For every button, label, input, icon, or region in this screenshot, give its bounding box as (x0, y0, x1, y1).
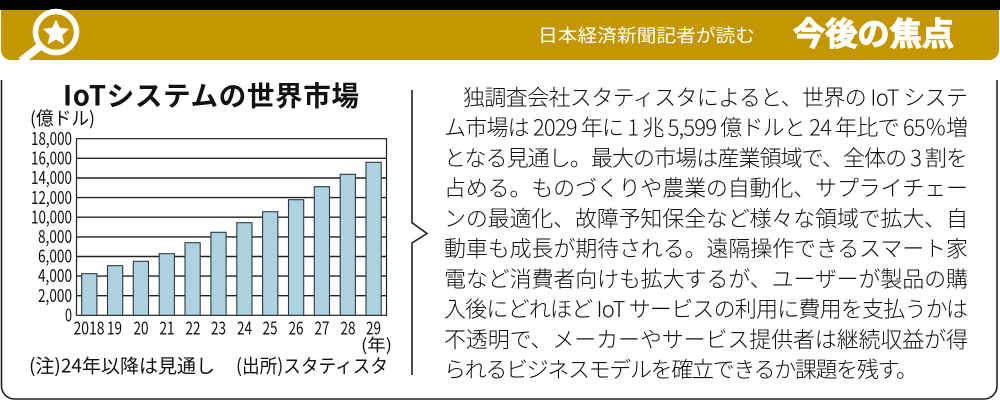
plot area and grid lines (76, 139, 386, 315)
x axis labels: 19 (107, 314, 122, 340)
x axis labels: (年) (361, 331, 392, 356)
header band (1, 9, 999, 61)
y axis labels: 18,000 (31, 125, 72, 151)
y axis labels: 2,000 (38, 282, 72, 308)
y axis unit: (億ドル) (30, 105, 95, 131)
y axis labels: 6,000 (38, 243, 72, 269)
y axis labels: 12,000 (31, 184, 72, 210)
y axis labels: 8,000 (38, 223, 72, 249)
icon: magnifier with star (21, 12, 76, 61)
chart source: (出所)スタティスタ (236, 352, 388, 378)
header subtitle: 日本経済新聞記者が読む (538, 22, 755, 48)
body text: 占める。ものづくりや農業の自動化、サプライチェー (444, 171, 968, 203)
x axis labels: 20 (134, 314, 149, 340)
x axis labels: 24 (237, 314, 252, 340)
x axis labels: 29 (366, 314, 381, 340)
x axis labels: 26 (288, 314, 304, 340)
x axis labels: 25 (262, 314, 278, 340)
chart note: (注)24年以降は見通し (29, 352, 215, 378)
body text: 不透明で、メーカーやサービス提供者は継続収益が得 (444, 322, 968, 354)
y axis labels: 0 (65, 301, 72, 327)
header title: 今後の焦点 (793, 9, 954, 55)
x axis labels: 22 (186, 314, 201, 340)
x axis labels: 21 (160, 314, 174, 340)
x axis labels: 27 (314, 314, 330, 340)
y axis labels: 4,000 (38, 262, 72, 288)
x axis labels: 28 (340, 314, 356, 340)
body text: ンの最適化、故障予知保全など様々な領域で拡大、自 (444, 202, 968, 234)
body text: 独調査会社スタティスタによると、世界の IoT システ (463, 80, 968, 112)
x axis labels (74, 314, 392, 356)
body text: 入後にどれほど IoT サービスの利用に費用を支払うかは (444, 292, 968, 324)
body text: られるビジネスモデルを確立できるか課題を残す。 (444, 352, 918, 384)
panel: chart (29, 74, 968, 384)
y axis labels: 14,000 (31, 164, 72, 190)
x axis labels: 23 (211, 314, 226, 340)
bar chart (29, 125, 392, 378)
y axis labels: 16,000 (31, 145, 72, 171)
chart title: IoTシステムの世界市場 (63, 74, 359, 114)
y axis labels (31, 125, 72, 327)
divider with arrow notch (412, 90, 427, 375)
bars (82, 162, 381, 315)
top black band (0, 0, 1000, 10)
body text: 電など消費者向けも拡大するが、ユーザーが製品の購 (444, 262, 968, 294)
body text (444, 80, 968, 384)
y axis labels: 10,000 (31, 203, 72, 229)
body text: となる見通し。最大の市場は産業領域で、全体の 3 割を (444, 141, 968, 173)
x axis labels: 2018 (74, 314, 105, 340)
body text: 動車も成長が期待される。遠隔操作できるスマート家 (444, 232, 968, 264)
body text: ム市場は 2029 年に 1 兆 5,599 億ドルと 24 年比で 65％増 (444, 110, 968, 142)
outer frame (2, 80, 997, 399)
